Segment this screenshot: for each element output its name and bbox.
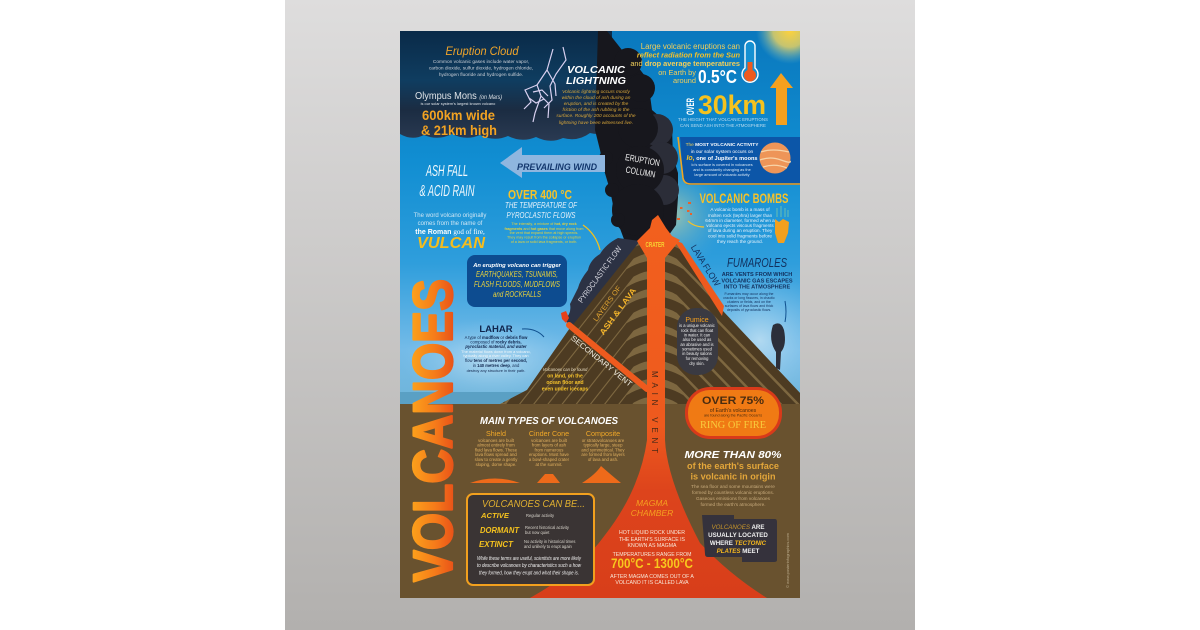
composite type: typically large, steep	[584, 442, 623, 448]
pumice panel: is a unique volcanic	[679, 323, 715, 328]
magma chamber text: TEMPERATURES RANGE FROM	[613, 552, 691, 558]
olympus mons	[415, 90, 502, 138]
sun-cooling text: 0.5°C	[698, 67, 737, 87]
shield type: slow to create a gently	[475, 457, 518, 462]
magma chamber text: KNOWN AS MAGMA	[628, 543, 677, 549]
panel: volcanoes can be	[467, 494, 594, 585]
secondary vent	[561, 311, 647, 389]
poster	[400, 31, 800, 598]
cinder cone type: volcanoes are built	[531, 438, 568, 443]
panel: Io: large amount of volcanic activity	[694, 172, 750, 177]
volcanic lightning text: eruption, and is created by the	[564, 101, 629, 107]
cinder cone type: a bowl-shaped crater	[529, 457, 570, 462]
fumaroles: FUMAROLES	[727, 256, 788, 270]
more than 80 percent	[684, 450, 782, 507]
tectonic plates panel: USUALLY LOCATED	[708, 532, 768, 539]
volcanic lightning text: friction of the ash rubbing in the	[563, 107, 630, 113]
heading: eruption cloud: carbon dioxide, sulfur dioxide, hydrogen chloride,	[429, 66, 533, 72]
volcanic bombs: VOLCANIC BOMBS	[700, 190, 788, 206]
layers of ash and lava	[593, 285, 638, 337]
more than 80 percent: formed the earth's atmosphere.	[700, 502, 766, 507]
volcanoes title: VOLCANOES	[401, 279, 464, 582]
pyroclastic temperature: of a lava or solid lava fragments, or both.	[511, 240, 577, 244]
pumice panel: in water. It can	[684, 332, 711, 338]
panel: volcanoes can be: VOLCANOES CAN BE...	[482, 499, 585, 510]
ash fall heading: & ACID RAIN	[420, 183, 475, 200]
panel: volcanoes can be: Recent historical activity	[525, 525, 570, 530]
tectonic plates panel: WHERE TECTONIC	[710, 540, 767, 547]
fumaroles: INTO THE ATMOSPHERE	[724, 284, 790, 290]
eruption column label	[625, 154, 660, 178]
panel: volcanoes can be: Regular activity	[526, 513, 555, 518]
composite type: of lava and ash.	[588, 457, 618, 462]
lahar: The material flows down from a volcano,	[461, 349, 531, 354]
fumaroles: surfaces of lava flows and thick	[725, 304, 773, 308]
volcanic bombs: volcano ejects viscous fragments	[706, 223, 774, 228]
panel: volcanoes can be: DORMANT	[480, 526, 520, 535]
eruption column label: ERUPTION	[624, 152, 661, 168]
over 30km: 30km	[698, 90, 766, 120]
volcanic lightning text: LIGHTNING	[566, 75, 626, 87]
shield type: volcanoes are built	[478, 438, 515, 443]
volcanic lightning text: within the cloud of ash during an	[562, 95, 631, 101]
prevailing wind arrow: PREVAILING WIND	[517, 162, 597, 173]
cinder cone type: at the summit.	[536, 462, 562, 467]
panel: Io: Io's surface is covered in volcanoes	[691, 162, 753, 167]
volcanic bombs: cool into solid fragments before	[708, 234, 772, 238]
panel: volcanoes can be: they formed, how they erupt and what their shape is.	[479, 570, 579, 576]
composite type: and symmetrical. They	[581, 448, 625, 452]
olympus mons: & 21km high	[421, 122, 497, 138]
composite type	[581, 429, 625, 483]
lahar: destroy any structure in their path.	[467, 368, 525, 373]
sun-cooling text	[630, 43, 740, 83]
heading: eruption cloud	[429, 44, 533, 78]
cinder cone type: from layers of ash	[532, 442, 567, 448]
olympus mons: Olympus Mons (on Mars)	[415, 90, 502, 102]
pumice panel: sometimes used	[682, 346, 713, 352]
volcanoes location note	[542, 367, 588, 392]
ring of fire: are found along the Pacific Ocean's	[704, 414, 762, 418]
vulcan text: VULCAN	[417, 235, 485, 252]
panel: volcanoes can be: While these terms are useful, scientists are more likely	[477, 556, 581, 562]
heading: eruption cloud: hydrogen fluoride and hydrogen sulfide.	[439, 72, 523, 78]
shield type: fluid lava flows. These	[475, 448, 518, 452]
magma chamber text	[610, 498, 694, 586]
shield type	[470, 429, 520, 483]
sun-cooling text: Large volcanic eruptions can	[641, 42, 740, 51]
composite type: are formed from layers	[581, 452, 625, 457]
shield type: Shield	[486, 429, 506, 438]
magma chamber text: CHAMBER	[631, 508, 673, 518]
icon: volcanic bomb	[775, 206, 789, 243]
cinder cone type: Cinder Cone	[529, 429, 569, 438]
panel: Io: Io, one of Jupiter's moons	[686, 155, 758, 162]
over 30km: OVER	[685, 98, 697, 115]
ring of fire: of Earth's volcanoes	[710, 408, 757, 414]
lava flow label: LAVA FLOW	[689, 243, 722, 288]
panel: volcanoes can be: but now quiet	[525, 530, 550, 535]
eruption cloud shape	[400, 31, 612, 141]
secondary vent: SECONDARY VENT	[569, 334, 634, 389]
pyroclastic flow: PYROCLASTIC FLOW	[576, 244, 624, 305]
main types heading: MAIN TYPES OF VOLCANOES	[480, 415, 618, 427]
over 30km	[678, 94, 768, 127]
up arrow	[770, 73, 793, 125]
pyroclastic temperature: The intensity, a mixture of hot, dry rock	[511, 222, 578, 226]
trigger box: FLASH FLOODS, MUDFLOWS	[474, 280, 561, 289]
panel: volcanoes can be: to describe volcanoes by characteristics such a how	[477, 563, 582, 569]
fumarole smoke	[771, 323, 785, 370]
sky	[400, 31, 830, 410]
lahar: pyroclastic material, and water	[464, 344, 527, 349]
lahar: in 140 metres deep, and	[473, 363, 520, 368]
lahar: composed of rocky debris,	[470, 340, 522, 344]
icon: Io moon	[760, 142, 790, 174]
cinder cone type: eruptions. Most have	[529, 452, 570, 457]
lava flow stream	[674, 240, 724, 316]
volcanic bombs: of lava during an eruption. They	[708, 228, 773, 233]
more than 80 percent: The sea floor and some mountains were	[691, 484, 775, 489]
sun-cooling text: and drop average temperatures	[630, 59, 740, 68]
lahar: A type of mudflow or debris flow	[465, 335, 528, 340]
volcanic lightning text: surface. Roughly 200 accounts of the	[556, 113, 636, 119]
credit line: © www.posterinfographics.com	[786, 533, 790, 588]
volcanic lightning text: Volcanic lightning occurs mostly	[562, 89, 631, 95]
fumaroles: deposits of pyroclastic flows.	[727, 308, 771, 312]
volcanic lightning text: VOLCANIC	[567, 64, 625, 76]
fumaroles: VOLCANIC GAS ESCAPES	[721, 278, 793, 284]
main vent label: MAIN VENT	[650, 371, 659, 453]
magma chamber text: HOT LIQUID ROCK UNDER	[619, 530, 685, 536]
eruption column	[595, 31, 679, 242]
cinder cone type: from numerous	[535, 448, 563, 452]
pyroclastic temperature: OVER 400 °C	[508, 188, 572, 202]
trigger box: and ROCKFALLS	[493, 290, 542, 299]
tectonic plates panel: VOLCANOES ARE	[711, 524, 765, 531]
lightning icon	[524, 47, 566, 122]
volcanoes location note: Volcanoes can be found	[543, 367, 588, 372]
lahar: flow tens of metres per second,	[465, 358, 527, 363]
vulcan text: comes from the name of	[418, 221, 483, 227]
volcanic lightning text: lightning have been witnessed live.	[559, 120, 633, 126]
cinder cone type	[529, 429, 570, 483]
magma chamber text: AFTER MAGMA COMES OUT OF A	[610, 574, 694, 580]
trigger box	[467, 255, 567, 307]
shield type: almost entirely from	[477, 442, 515, 448]
pumice panel: rock that can float	[681, 328, 714, 333]
more than 80 percent: formed by countless volcanic eruptions.	[692, 490, 774, 495]
sun-cooling text: on Earth by	[658, 68, 696, 77]
prevailing wind arrow	[500, 147, 605, 178]
crater label: CRATER	[646, 242, 664, 249]
heading: eruption cloud: Eruption Cloud	[446, 44, 519, 58]
pyroclastic temperature: THE TEMPERATURE OF	[505, 201, 578, 210]
fumaroles: ARE VENTS FROM WHICH	[722, 272, 792, 278]
heading: eruption cloud: Common volcanic gases include water vapor,	[433, 59, 529, 65]
arrow to pyroclastic flow	[583, 225, 600, 250]
pyroclastic temperature: PYROCLASTIC FLOWS	[506, 211, 576, 220]
more than 80 percent: is volcanic in origin	[690, 472, 776, 482]
olympus mons: is our solar system's largest known volcano	[421, 101, 495, 106]
vulcan text: The word volcano originally	[414, 213, 486, 219]
pyroclastic flow	[564, 238, 640, 326]
tectonic plates panel	[702, 515, 777, 562]
ring of fire: RING OF FIRE	[700, 420, 766, 431]
sun-cooling text: reflect radiation from the Sun	[637, 50, 740, 60]
pumice panel: an abrasive and is	[680, 342, 714, 347]
lava spatter and arrow	[677, 202, 704, 227]
trigger box: EARTHQUAKES, TSUNAMIS,	[476, 270, 558, 279]
magma chamber text: THE EARTH'S SURFACE IS	[619, 537, 686, 543]
volcanic bombs	[700, 190, 788, 244]
volcanoes location note: on land, on the	[547, 374, 583, 380]
trigger box: An erupting volcano can trigger	[472, 263, 562, 269]
panel: Io: in our solar system occurs on	[691, 149, 754, 155]
lahar	[461, 324, 544, 373]
fumaroles: Fumaroles may occur along the	[724, 292, 774, 296]
volcanic bombs: 64mm in diameter, formed when a	[705, 218, 775, 223]
magma chamber text: MAGMA	[636, 498, 668, 508]
shield type: sloping, dome shape.	[476, 462, 516, 467]
fumaroles: cracks or long fissures, in chaotic	[723, 296, 775, 300]
volcanoes location note: ocean floor and	[546, 380, 584, 386]
composite type: Composite	[586, 429, 620, 438]
ash fall heading: ASH FALL	[425, 163, 468, 180]
more than 80 percent: MORE THAN 80%	[684, 450, 782, 461]
ground	[400, 404, 800, 598]
more than 80 percent: of the earth's surface	[687, 461, 779, 472]
pumice panel: for removing	[686, 356, 709, 361]
pyroclastic temperature: They may result from the collapse or eruption	[507, 236, 581, 240]
over 30km: CAN SEND ASH INTO THE ATMOSPHERE	[680, 123, 766, 129]
more than 80 percent: Gaseous emissions from volcanoes	[696, 496, 771, 501]
vulcan text	[414, 213, 486, 252]
panel: Io	[678, 137, 800, 185]
pumice panel: Pumice	[685, 317, 709, 324]
volcanoes location note: even under icecaps	[542, 386, 588, 392]
shield type: lava flows spread and	[475, 452, 517, 457]
fumaroles: clusters or fields, and on the	[727, 300, 771, 304]
pyroclastic temperature	[505, 188, 583, 244]
magma chamber text: VOLCANO IT IS CALLED LAVA	[615, 580, 689, 586]
over 30km: THE HEIGHT THAT VOLCANIC ERUPTIONS	[678, 117, 768, 123]
fumaroles	[721, 256, 793, 322]
pyroclastic temperature: the vent that expand them at high speeds.	[510, 231, 578, 235]
layers of ash and lava: LAYERS OF	[593, 285, 623, 323]
lahar: LAHAR	[479, 324, 513, 335]
sun	[758, 31, 800, 62]
volcanic bombs: they reach the ground.	[717, 239, 763, 244]
panel: volcanoes can be: and unlikely to erupt again	[524, 544, 573, 549]
volcanic lightning text	[556, 64, 636, 126]
lahar: typically along a river valley. They can	[463, 353, 529, 358]
ash fall heading	[420, 165, 474, 196]
panel: volcanoes can be: ACTIVE	[480, 511, 510, 520]
volcanic bombs: A volcanic bomb is a mass of	[710, 207, 770, 212]
mountain with strata	[500, 243, 800, 404]
composite type: or stratovolcanoes are	[582, 438, 625, 443]
ring of fire: OVER 75%	[702, 395, 764, 407]
pumice panel: also be used as	[683, 337, 711, 342]
ring of fire	[685, 387, 782, 439]
sun-cooling text: around	[673, 76, 696, 85]
pumice panel: in beauty salons	[682, 351, 712, 356]
vulcan text: the Roman god of fire,	[415, 228, 485, 236]
olympus mons: 600km wide	[422, 107, 495, 123]
tectonic plates panel: PLATES MEET	[717, 548, 760, 555]
pumice panel	[677, 308, 718, 375]
pumice panel: dry skin.	[689, 361, 705, 366]
thermometer icon	[742, 41, 758, 82]
magma chamber text: 700°C - 1300°C	[611, 555, 693, 571]
volcanic bombs: molten rock (tephra) larger than	[708, 213, 773, 218]
magma chamber and main vent	[530, 215, 767, 598]
layers of ash and lava: ASH & LAVA	[598, 286, 638, 337]
pyroclastic temperature: fragments and hot gases that move along from	[505, 227, 583, 231]
panel: volcanoes can be: No activity in historical times	[524, 539, 575, 544]
eruption column label: COLUMN	[625, 165, 656, 180]
panel: Io: The MOST VOLCANIC ACTIVITY	[686, 142, 759, 148]
panel: Io: and is constantly changing as the	[693, 167, 751, 172]
panel: volcanoes can be: EXTINCT	[479, 540, 514, 549]
